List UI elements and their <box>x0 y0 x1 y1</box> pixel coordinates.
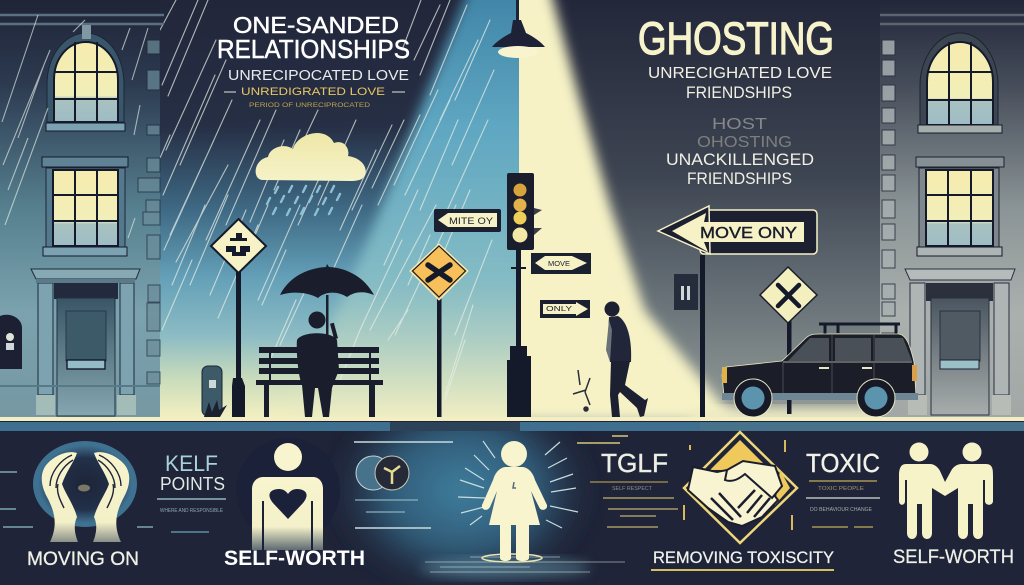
small plant <box>573 370 590 411</box>
heading: ghosting: FRIENDSHIPS <box>687 169 792 188</box>
heading: ghosting: OHOSTING <box>697 134 792 151</box>
sign: move only arrow: MOVE ONY <box>700 225 797 242</box>
middle window right <box>916 157 1004 256</box>
panel: right building <box>880 0 1024 417</box>
label: self-worth right: SELF-WORTH <box>893 547 1014 568</box>
left hand <box>42 452 78 542</box>
text block: toxic: TOXIC <box>806 448 880 478</box>
text block: self points right: TGLF <box>601 448 668 478</box>
sign: cream diamond x <box>760 267 817 414</box>
traffic light <box>507 173 542 417</box>
icon: self-worth person with heart <box>236 438 340 550</box>
heading: one-sided relationships: RELATIONSHIPS <box>217 34 410 64</box>
text block: toxic: TOXIC PEOPLE <box>818 486 865 492</box>
bench <box>256 347 383 417</box>
umbrella <box>280 264 374 335</box>
panel: left building <box>0 0 164 417</box>
bench with person under umbrella <box>256 264 383 417</box>
door right <box>905 269 1015 415</box>
right hand <box>93 452 129 542</box>
heading: ghosting: FRIENDSHIPS <box>686 83 792 102</box>
mailbox on street <box>202 366 227 417</box>
panel: bottom band <box>0 417 1024 584</box>
heading: ghosting: UNACKILLENGED <box>666 150 814 169</box>
text block: kelf points: KELF <box>165 451 218 476</box>
text block: toxic: DO BEHAVIOUR CHANGE <box>810 507 873 513</box>
building quoins left <box>138 40 160 384</box>
label: removing toxicity: REMOVING TOXISCITY <box>653 548 834 567</box>
sign: small arrow <box>540 300 590 318</box>
panel: right street background <box>519 0 880 417</box>
icon: small medallion <box>354 442 453 528</box>
sign: move only arrow <box>658 206 817 417</box>
text block: self points right <box>577 436 678 527</box>
icon: standing woman with rays <box>420 441 625 578</box>
sign: middle arrow <box>531 253 591 274</box>
arched window left <box>46 25 125 131</box>
sign: left diamond on post <box>211 219 266 417</box>
panel: rain on left street <box>160 0 494 400</box>
heading: one-sided relationships: UNRECIPOCATED LOVE <box>228 67 409 84</box>
right hand of handshake <box>725 461 782 498</box>
text block: self points right: SELF RESPECT <box>612 486 652 492</box>
left hand of handshake <box>688 467 778 526</box>
text block: kelf points: WHERE AND RESPONSIBLE <box>160 508 224 514</box>
heading: ghosting: GHOSTING <box>638 13 834 64</box>
icon: two people holding hands <box>899 442 993 539</box>
door left <box>31 269 140 416</box>
heading: one-sided relationships <box>217 12 410 109</box>
sign: small arrow: ONLY <box>546 306 572 313</box>
heading: ghosting: HOST <box>712 116 767 133</box>
lamp <box>492 0 545 58</box>
heading: one-sided relationships: ONE-SANDED <box>233 12 399 38</box>
building quoins right <box>882 40 895 347</box>
panel: left street background <box>160 0 530 421</box>
walking person <box>604 302 648 417</box>
sign: small one-way one <box>434 209 501 232</box>
mailbox left <box>0 315 22 369</box>
heading: ghosting: UNRECIGHATED LOVE <box>648 65 832 82</box>
seated person <box>297 312 339 417</box>
icon: handshake diamond <box>684 432 797 543</box>
sign: yellow diamond x <box>410 244 468 418</box>
car <box>722 324 918 417</box>
middle window left <box>42 157 128 256</box>
sign: middle arrow: MOVE <box>548 261 570 268</box>
sign: small one-way one: MITE OY <box>449 216 493 226</box>
label: moving on: MOVING ON <box>27 549 139 570</box>
label: self-worth left: SELF-WORTH <box>224 547 365 570</box>
text block: toxic <box>806 448 880 527</box>
heading: ghosting <box>638 13 834 188</box>
arched window right <box>918 33 1002 133</box>
utility box <box>674 274 698 310</box>
icon: hands (moving on) <box>0 441 153 542</box>
text block: kelf points: POINTS <box>160 474 225 494</box>
icon: rain cloud <box>256 133 366 215</box>
heading: one-sided relationships: UNREDIGRATED LOVE <box>241 86 385 98</box>
text block: kelf points <box>157 451 226 532</box>
heading: one-sided relationships: PERIOD OF UNRECIPROCATED <box>249 103 371 109</box>
